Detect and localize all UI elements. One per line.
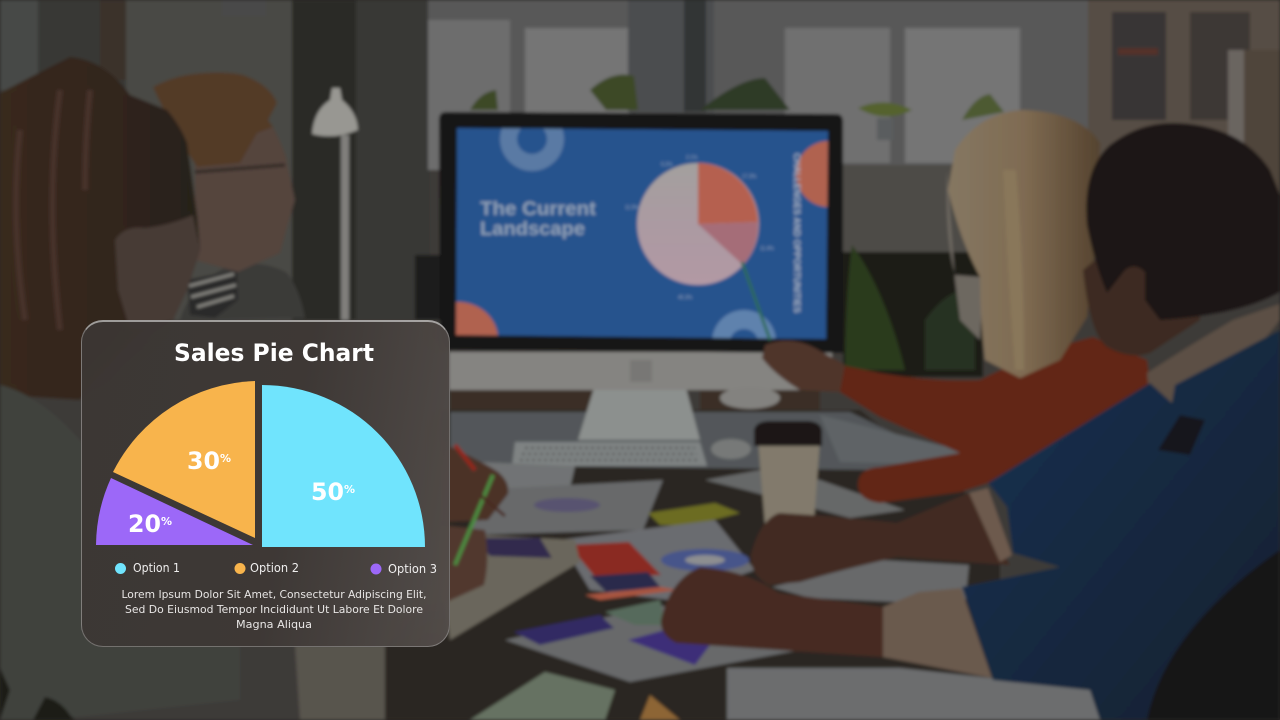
monitor screen: 5.2% bbox=[661, 162, 673, 168]
slice: 20% purple: 20 bbox=[128, 510, 161, 538]
legend item: option 1: Option 1 bbox=[133, 561, 180, 575]
description text: Lorem Ipsum Dolor Sit Amet, Consectetur Adipiscing Elit, bbox=[122, 589, 427, 601]
monitor screen: Landscape bbox=[480, 219, 585, 240]
dreadlocks woman bbox=[0, 57, 450, 720]
monitor screen: 11.4% bbox=[760, 246, 774, 252]
blonde woman bbox=[742, 110, 1150, 503]
description text bbox=[122, 589, 427, 631]
forearms and hands bbox=[661, 488, 1012, 678]
slice: 50% cyan: 50 bbox=[311, 478, 344, 506]
slice: 50% cyan: % bbox=[344, 483, 355, 496]
slice: 20% purple: % bbox=[161, 515, 172, 528]
panel: sales pie chart glass card bbox=[81, 320, 450, 647]
slice: 30% orange: % bbox=[220, 452, 231, 465]
legend item: option 3: Option 3 bbox=[388, 562, 437, 576]
slice: 30% orange: 30 bbox=[187, 447, 220, 475]
legend bbox=[115, 561, 437, 576]
pencils and left hand bbox=[440, 442, 508, 605]
description text: Magna Aliqua bbox=[236, 619, 312, 631]
monitor bbox=[418, 107, 862, 440]
slice: 20% purple bbox=[96, 478, 253, 545]
description text: Sed Do Eiusmod Tempor Incididunt Ut Labore Et Dolore bbox=[125, 604, 423, 616]
right man bbox=[962, 123, 1280, 720]
desk bbox=[380, 390, 1000, 720]
slice: 30% orange bbox=[113, 381, 255, 538]
legend item: option 2: Option 2 bbox=[250, 561, 299, 575]
paper cup bbox=[754, 421, 822, 525]
title: Sales Pie Chart bbox=[174, 339, 374, 367]
glasses man bbox=[153, 72, 305, 320]
legend item: option 1 bbox=[115, 561, 180, 575]
monitor screen: 17.3% bbox=[742, 174, 757, 180]
monitor screen: CHALLENGES AND OPPORTUNITIES bbox=[792, 153, 802, 313]
monitor screen bbox=[452, 125, 831, 342]
slice: 50% cyan bbox=[262, 385, 425, 547]
lamp bbox=[312, 88, 358, 320]
monitor screen: 11.5% bbox=[625, 205, 639, 211]
keyboard, mouse and papers bbox=[440, 415, 1108, 720]
bookcase bbox=[1088, 0, 1280, 200]
monitor screen: 45.3% bbox=[678, 295, 693, 301]
pie chart bbox=[96, 381, 425, 547]
plants bbox=[470, 75, 1004, 370]
monitor screen: 2.1% bbox=[686, 155, 698, 161]
monitor screen: The Current bbox=[480, 199, 597, 220]
